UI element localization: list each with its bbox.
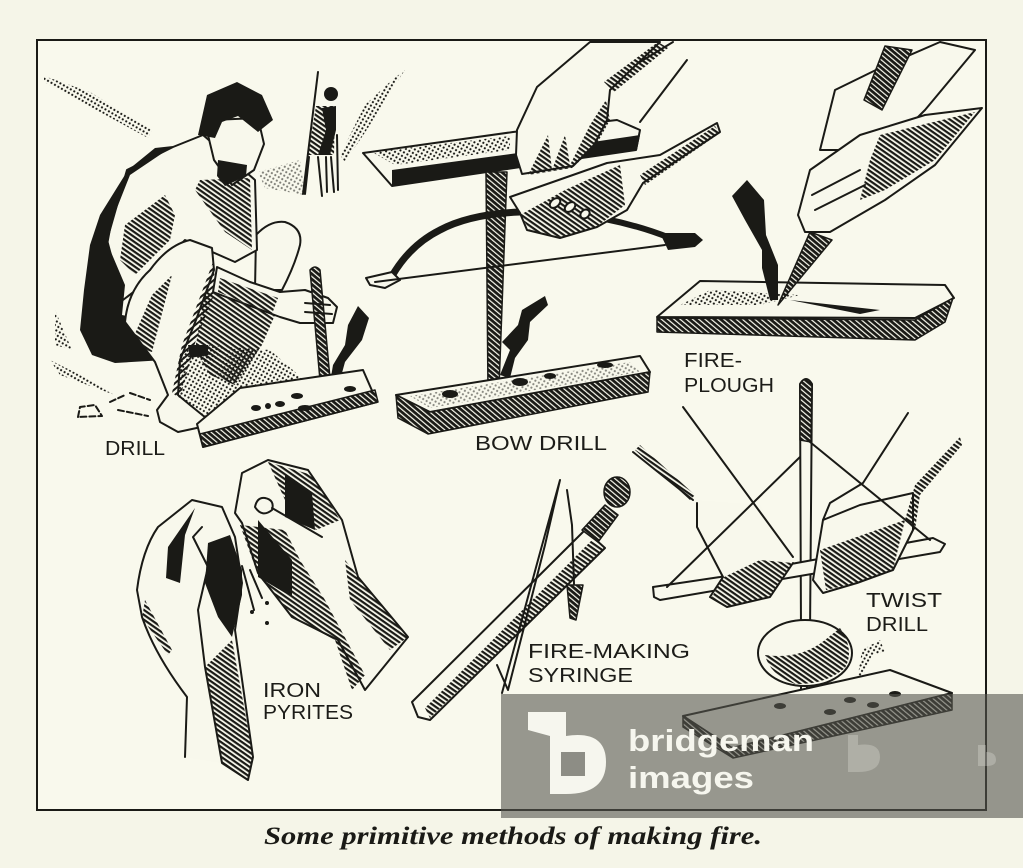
panel: twist drill: DRILL — [866, 614, 928, 636]
watermark: bridgeman images: bridgeman — [628, 723, 814, 758]
left hand — [137, 500, 253, 780]
drill board — [197, 370, 377, 447]
smoke — [732, 180, 778, 300]
watermark: bridgeman images: images — [628, 760, 754, 795]
logo mark — [528, 712, 606, 794]
lower board — [396, 356, 650, 434]
panel: drill — [44, 70, 405, 460]
right hand with stone — [235, 460, 408, 690]
far knee — [255, 222, 300, 290]
label: drill: DRILL — [105, 438, 165, 460]
beard — [217, 160, 247, 186]
landscape background — [44, 70, 405, 395]
label: bow drill: BOW DRILL — [475, 433, 607, 455]
near thigh and shin — [125, 240, 214, 432]
back leg shading — [195, 290, 275, 385]
arm — [213, 267, 337, 323]
fur garment — [80, 146, 173, 363]
drill stick — [310, 267, 332, 402]
plunger and knob — [582, 505, 618, 542]
label: fire-making syringe: FIRE-MAKING — [528, 641, 690, 663]
icon: distant hunter — [303, 72, 338, 196]
panel: fire-plough: PLOUGH — [684, 375, 774, 397]
flywheel stone — [758, 620, 852, 686]
caption: Some primitive methods of making fire. — [264, 823, 762, 850]
plough board — [657, 281, 954, 340]
syringe tube — [412, 530, 605, 720]
watermark: bridgeman images — [501, 694, 1023, 818]
panel: twist drill — [633, 379, 962, 758]
panel: fire-making syringe: SYRINGE — [528, 665, 633, 687]
top handle board — [363, 120, 640, 186]
twist drill board — [683, 670, 952, 758]
head — [208, 118, 264, 185]
bow — [366, 212, 703, 288]
label: iron pyrites: IRON — [263, 680, 321, 702]
hands — [633, 437, 962, 607]
figure: seated man — [78, 82, 378, 447]
hand: lower holding bow — [510, 123, 720, 238]
smoke — [818, 640, 885, 708]
hands — [798, 42, 982, 232]
panel: bow drill — [363, 42, 720, 455]
strings — [667, 407, 930, 587]
label: fire-plough: FIRE- — [684, 350, 742, 372]
tinder weight and cords — [497, 480, 574, 693]
smoke — [500, 296, 548, 378]
shaded ground — [150, 345, 310, 420]
pebbles — [78, 393, 150, 417]
spindle — [486, 172, 507, 392]
sparks — [242, 566, 269, 625]
plough stick — [778, 232, 832, 305]
vertical spindle — [800, 379, 812, 633]
faint repeated marks — [848, 735, 996, 772]
hair — [198, 82, 273, 138]
panel: fire-making syringe — [412, 477, 690, 720]
smoke — [328, 306, 369, 395]
panel: iron pyrites: PYRITES — [263, 702, 353, 724]
hand: upper — [516, 42, 687, 175]
panel: iron pyrites — [137, 460, 408, 780]
crossbar — [653, 538, 945, 600]
body — [107, 135, 257, 300]
label: twist drill: TWIST — [866, 590, 942, 612]
panel: fire-plough — [657, 42, 982, 397]
